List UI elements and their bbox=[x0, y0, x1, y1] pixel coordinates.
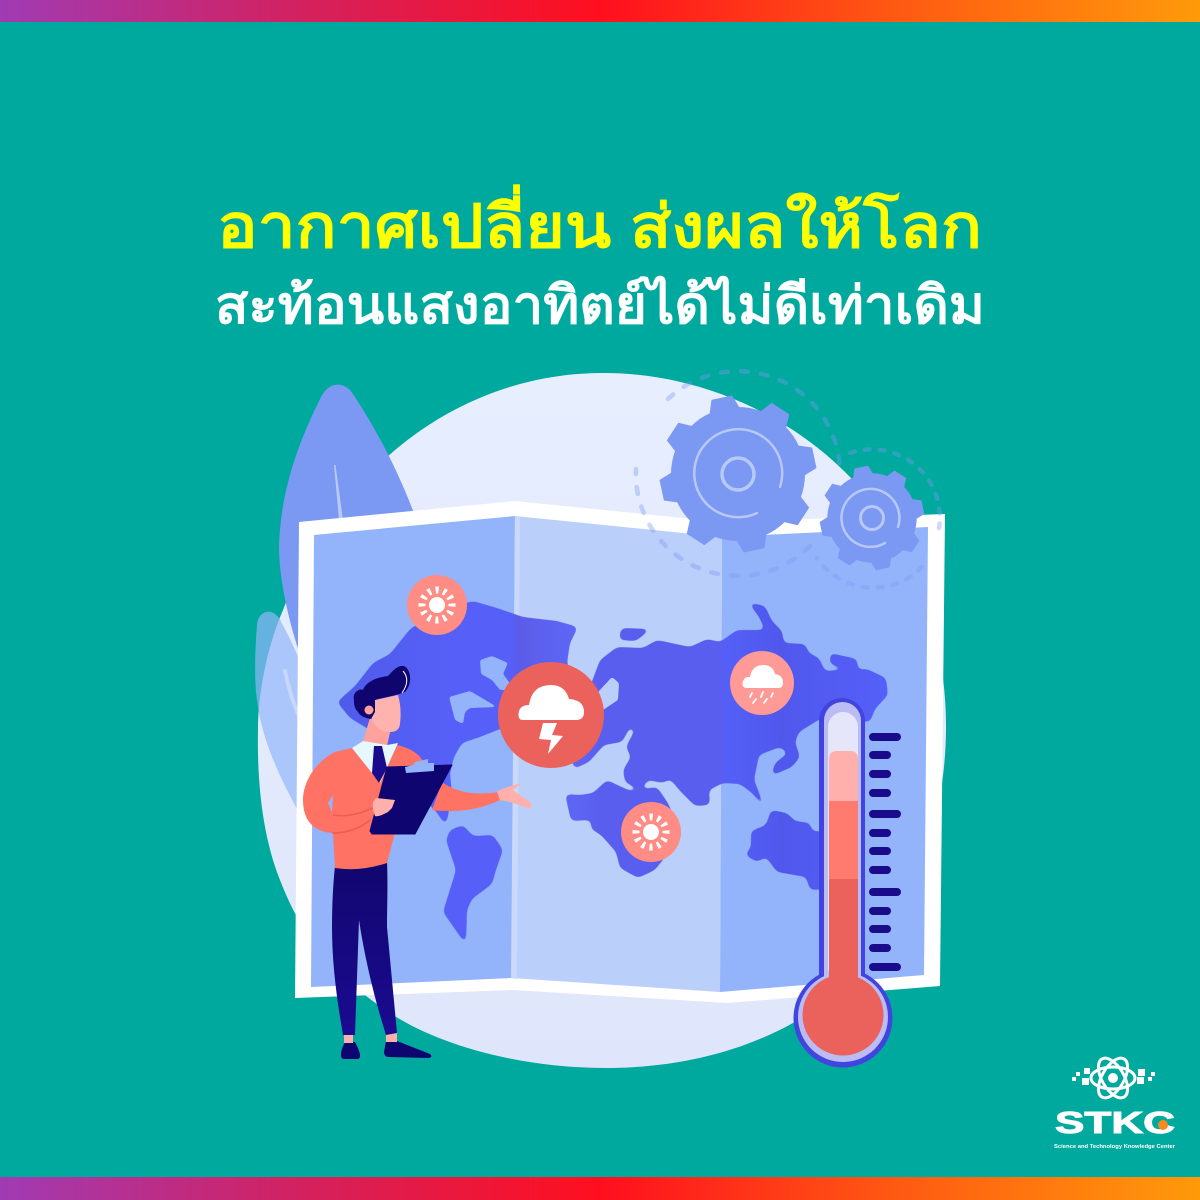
STKC logo bbox=[1054, 1053, 1176, 1150]
logo wordmark: STKC bbox=[1055, 1105, 1175, 1140]
shirt collar bbox=[352, 741, 398, 783]
sun badge africa bbox=[621, 802, 681, 862]
clipboard clip bbox=[405, 759, 434, 773]
sweater bbox=[303, 745, 432, 869]
mercury red bbox=[829, 879, 858, 989]
right shoe bbox=[384, 1041, 431, 1058]
world continents bbox=[337, 601, 888, 945]
left shoe bbox=[341, 1042, 360, 1059]
thermometer inner shell bbox=[824, 702, 861, 1002]
sweater fold lines bbox=[332, 808, 372, 833]
mercury pink bbox=[829, 751, 858, 801]
small gear bbox=[810, 456, 934, 580]
face bbox=[370, 695, 401, 732]
top gradient bar bbox=[0, 0, 1200, 22]
map right panel bbox=[720, 527, 928, 992]
small island east bbox=[830, 653, 858, 670]
lake bbox=[480, 656, 516, 690]
large gear bbox=[645, 381, 831, 567]
south america bbox=[443, 825, 503, 945]
illustration: climate map scene bbox=[255, 371, 946, 1068]
large leaf bbox=[279, 385, 422, 655]
hand pointing bbox=[497, 783, 531, 809]
hand holding clipboard bbox=[373, 798, 395, 816]
hair bbox=[354, 666, 410, 719]
map white frame bbox=[295, 501, 945, 1003]
extended arm bbox=[432, 782, 500, 811]
storm badge bbox=[498, 662, 604, 768]
logo orange dot bbox=[1158, 1120, 1168, 1130]
person presenting with clipboard bbox=[303, 666, 531, 1059]
logo atom icon bbox=[1091, 1053, 1135, 1103]
sea inlet bbox=[598, 677, 619, 712]
map lakes and inlets bbox=[449, 656, 619, 724]
bottom gradient bar bbox=[0, 1177, 1200, 1200]
trousers bbox=[332, 861, 397, 1035]
thermometer outer shell bbox=[819, 698, 865, 998]
rain badge bbox=[730, 651, 794, 715]
thermometer tick marks bbox=[869, 733, 901, 971]
tube glass bbox=[828, 712, 858, 982]
thermometer bbox=[794, 698, 901, 1068]
sun badge north america bbox=[407, 575, 467, 635]
map left panel bbox=[311, 516, 515, 987]
africa bbox=[565, 780, 682, 878]
ear bbox=[364, 706, 374, 714]
small island north bbox=[619, 628, 651, 641]
map middle panel bbox=[512, 516, 722, 992]
eurasia bbox=[565, 602, 888, 812]
north america bbox=[337, 601, 578, 826]
logo tagline: Science and Technology Knowledge Center bbox=[1054, 1144, 1176, 1150]
ankles bbox=[344, 1033, 397, 1043]
necktie bbox=[372, 746, 387, 783]
arm gap bbox=[328, 795, 333, 812]
neck bbox=[363, 718, 391, 746]
title line 2: สะท้อนแสงอาทิตย์ได้ไม่ดีเท่าเดิม bbox=[215, 275, 985, 335]
title line 1: อากาศเปลี่ยน ส่งผลให้โลก bbox=[217, 184, 982, 260]
clipboard bbox=[370, 765, 452, 834]
australia bbox=[745, 810, 830, 890]
logo pixel dots bbox=[1072, 1068, 1155, 1085]
hair highlight bbox=[402, 671, 407, 693]
inlet bbox=[449, 691, 497, 724]
background blob bbox=[258, 373, 946, 1068]
small leaf bbox=[255, 612, 298, 808]
thermometer bulb bbox=[802, 974, 884, 1056]
folded map bbox=[295, 501, 945, 1003]
mercury coral bbox=[829, 801, 858, 879]
map fold highlight bbox=[511, 516, 520, 979]
title bbox=[215, 184, 985, 335]
dashed gear orbits bbox=[636, 371, 940, 588]
